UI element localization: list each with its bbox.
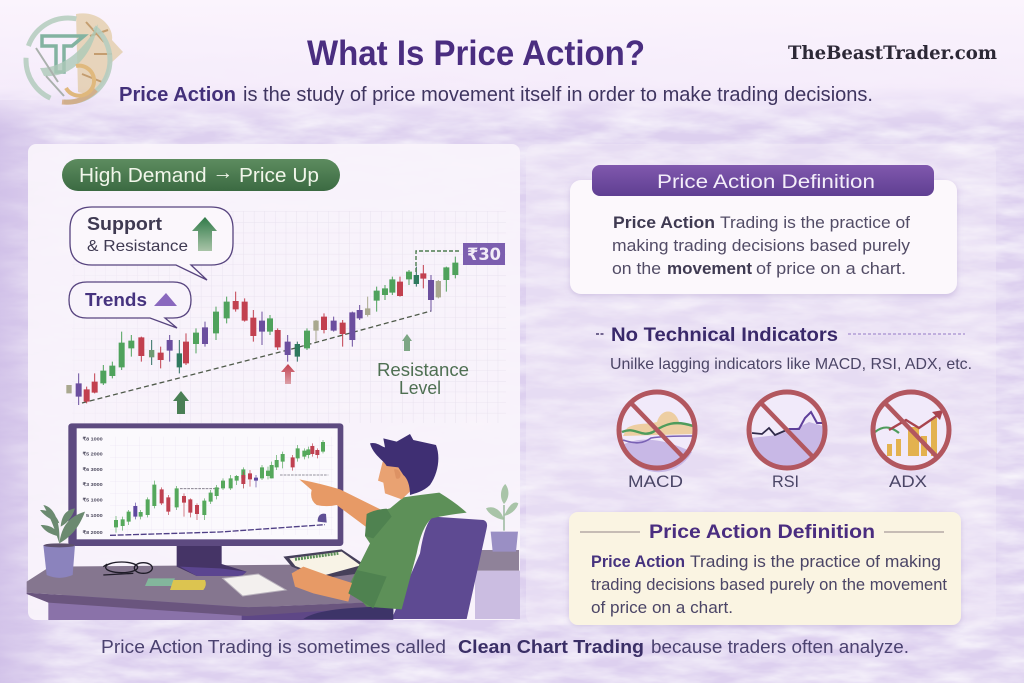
definition text: of price on a chart. [756, 259, 906, 278]
footer text: because traders often analyze. [651, 637, 909, 657]
screen axis labels: ₹5 1000 [83, 498, 103, 504]
card: definition highlighted: Price Action Definition [649, 522, 875, 543]
card: definition highlighted: trading decisions based purely on the movement [591, 576, 947, 594]
definition text [612, 213, 911, 278]
tablet [283, 549, 365, 578]
card: definition highlighted: Trading is the practice of making [690, 553, 941, 571]
arrow: red up [281, 364, 295, 384]
screen axis labels: ₹5 2000 [83, 452, 103, 458]
sticky notes [145, 578, 206, 590]
card: definition [570, 165, 957, 294]
text: lagging indicators: Unilke lagging indicators like MACD, RSI, ADX, etc. [610, 356, 972, 373]
icon: no ADX [873, 392, 949, 468]
footer text: Clean Chart Trading [458, 637, 644, 657]
icon: no RSI [749, 392, 825, 468]
logo: lion emblem [26, 13, 123, 102]
footer text [101, 637, 909, 657]
screen axis labels: ₹6 3000 [83, 467, 103, 473]
glasses [103, 562, 152, 575]
screen axis labels: ₹8 1000 [83, 437, 103, 443]
icon: no MACD [619, 392, 695, 472]
card: definition highlighted [569, 512, 961, 625]
heading: no technical indicators: No Technical Indicators [611, 325, 838, 346]
potted plant [40, 505, 85, 578]
definition text: Trading is the practice of [720, 213, 910, 232]
pill: high demand [62, 159, 340, 191]
trader [292, 434, 467, 619]
arrow: pale green up [402, 334, 412, 351]
indicator labels [628, 472, 927, 491]
screen axis labels: 5 1000 [86, 513, 103, 519]
candlestick chart [69, 257, 455, 405]
indicator labels: RSI [772, 472, 799, 491]
panel: definition and indicators [526, 144, 996, 625]
footer text: Price Action Trading is sometimes called [101, 637, 446, 657]
screen axis labels: ₹8 2000 [83, 530, 103, 536]
subtitle: Price Action [119, 84, 236, 106]
computer monitor [68, 423, 343, 576]
callout: trends [69, 282, 191, 328]
definition text: making trading decisions based purely [612, 236, 911, 255]
card: definition highlighted: Price Action [591, 553, 685, 571]
callout: trends: Trends [85, 290, 147, 310]
callout: support and resistance [70, 207, 233, 280]
pill: high demand: Price Up [233, 165, 319, 187]
pill: high demand: High Demand [79, 165, 201, 187]
callout: support and resistance: Support [87, 214, 162, 234]
indicator labels: ADX [889, 472, 927, 491]
definition text: movement [667, 259, 752, 278]
arrow: green up [173, 391, 189, 414]
definition header bar [592, 165, 934, 196]
brand website: TheBeastTrader.com [788, 43, 997, 64]
price tag: 30 rupees: ₹30 [467, 245, 501, 265]
screen axis labels: ₹3 3000 [83, 482, 103, 488]
pill: high demand: → [212, 162, 233, 184]
resistance level label: Level [399, 378, 441, 398]
title: What Is Price Action? [307, 34, 645, 73]
chart grid [72, 211, 506, 423]
support trendline [82, 311, 431, 403]
definition header bar: Price Action Definition [657, 172, 875, 193]
resistance level label [377, 360, 469, 398]
illustration: trader at desk [27, 423, 520, 620]
definition text: Price Action [613, 213, 715, 232]
indicator labels: MACD [628, 472, 683, 491]
chair [392, 517, 487, 619]
resistance level label: Resistance [377, 360, 469, 380]
screen candlesticks [116, 440, 323, 533]
price tag: 30 rupees [416, 243, 505, 272]
card: definition highlighted: of price on a chart. [591, 599, 733, 617]
keyboard [223, 574, 286, 596]
right side desk and plant [475, 484, 520, 619]
callout: support and resistance: & Resistance [87, 238, 188, 255]
subtitle: is the study of price movement itself in order to make trading decisions. [243, 84, 873, 106]
desk [27, 564, 393, 620]
definition text: on the [612, 259, 661, 278]
screen axis labels [83, 437, 103, 536]
panel: chart and trader [27, 144, 520, 620]
